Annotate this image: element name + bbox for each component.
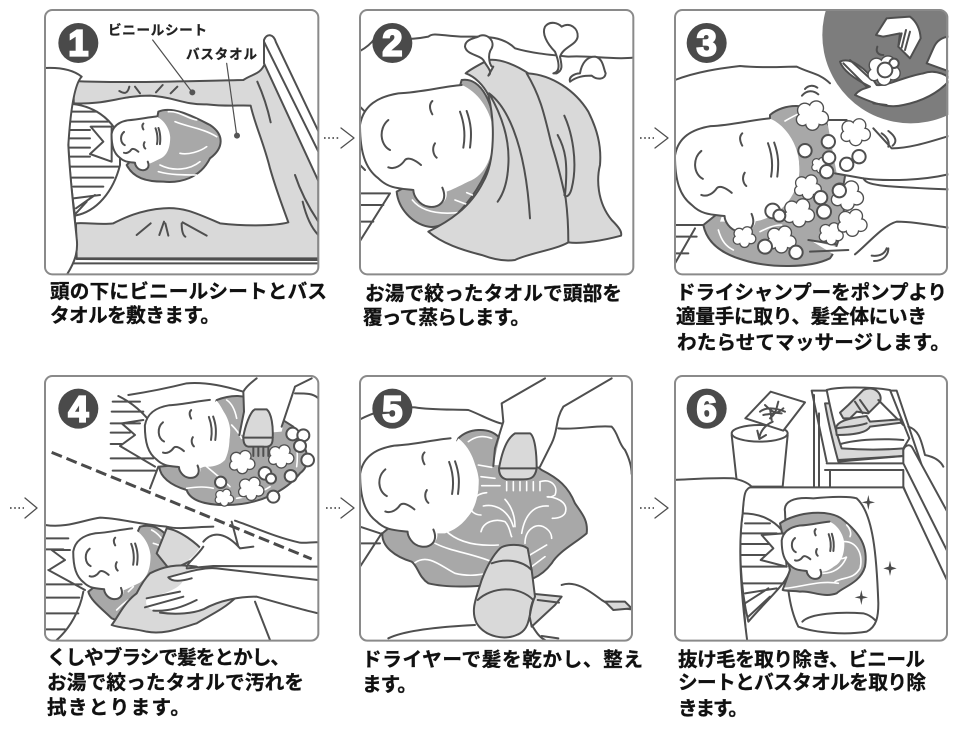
upper figure [111,383,243,488]
number 6 [687,388,727,429]
pillow [360,407,632,638]
caption 4: くしやブラシで髪をとかし、 [47,646,290,669]
hand with brush [240,392,284,435]
caption 3: わたらせてマッサージします。 [677,332,950,354]
face [782,522,844,579]
caption 5: ドライヤーで髪を乾かし、整え [362,649,643,671]
number 6: 6 [697,388,717,429]
towel [428,60,621,261]
face [360,85,493,207]
panel: step 5 [360,375,632,641]
caption 1 [50,281,327,327]
arrow 2 to 3 [640,128,668,148]
face [360,438,479,547]
pillow [785,497,878,633]
caption 6: シートとバスタオルを取り除 [678,672,926,694]
panel: step 2 [360,10,633,274]
caption 6: 抜け毛を取り除き、ビニール [678,649,925,671]
bed sheet [742,487,950,642]
number 2 [372,23,412,64]
caption 2 [363,283,622,329]
striped shirt [68,104,120,216]
number 5: 5 [382,388,402,429]
upper foam [215,428,314,506]
caption 3: 適量手に取り、髪全体にいき [676,306,927,328]
blanket [670,478,752,642]
arms [146,546,238,613]
pointer: sheet [153,40,192,92]
caption 3 [676,282,950,354]
pointer: towel [227,63,237,135]
pillow [360,34,633,58]
hands [828,122,846,174]
inset: pump in hand [822,11,948,124]
label: ビニールシート: ビニールシート [108,22,207,38]
caption 2: お湯で絞ったタオルで頭部を [365,283,622,305]
motion marks [802,86,895,261]
hand with brush [494,423,539,467]
caption 4: 拭きとります。 [47,696,190,719]
hair [397,80,495,227]
arrow to 4 [10,498,37,518]
caption 5: ます。 [362,674,417,696]
steam [465,35,493,76]
arrow 5 to 6 [640,498,668,518]
face [112,117,170,170]
number 1 [58,23,98,64]
number 4: 4 [68,388,88,429]
hair [780,513,866,595]
bath towel [73,96,288,225]
caption 4 [47,646,304,719]
panel: step 4 [45,375,320,641]
cabinet [812,391,923,487]
caption 6: きます。 [678,698,748,720]
pillow [675,66,830,83]
shoulder stripes [360,107,390,241]
face [675,118,799,232]
caption 1: 頭の下にビニールシートとバス [50,281,327,303]
number 4 [58,388,98,429]
number 5 [372,388,412,429]
bin [732,435,788,487]
label: バスタオル: バスタオル [186,47,258,62]
panel: step 1 [40,10,323,275]
upper hair [159,396,307,505]
number 1: 1 [68,23,88,64]
arrow into bin [757,422,773,439]
number 2: 2 [382,23,402,64]
arrow 1 to 2 [324,128,354,148]
dashed divider [52,452,312,559]
towels and items [825,403,903,462]
blanket [46,66,83,274]
hair [703,106,845,266]
caption 2: 覆って蒸らします。 [363,307,530,329]
dryer [528,594,562,627]
rail [903,445,950,557]
lower figure [45,518,318,640]
sparkles [855,495,897,605]
hair dryer [840,388,881,418]
number 3: 3 [697,23,717,64]
caption 4: お湯で絞ったタオルで汚れを [47,672,304,694]
caption 1: タオルを敷きます。 [50,304,220,327]
hair [127,110,221,182]
lower towel [156,528,200,566]
caption 6 [678,649,926,720]
tissue with hair [745,392,805,431]
lower hair [88,526,173,622]
number 3 [687,23,727,64]
caption 3: ドライシャンプーをポンプより [676,282,947,304]
bed rail [263,34,318,182]
arrow 4 to 5 [326,498,354,518]
foam [734,101,870,259]
panel: step 6 [670,376,950,642]
plastic sheet [73,63,318,260]
panel: step 3 [675,0,966,274]
striped shirt [740,513,790,622]
caption 5 [362,649,643,696]
hair [382,430,587,586]
